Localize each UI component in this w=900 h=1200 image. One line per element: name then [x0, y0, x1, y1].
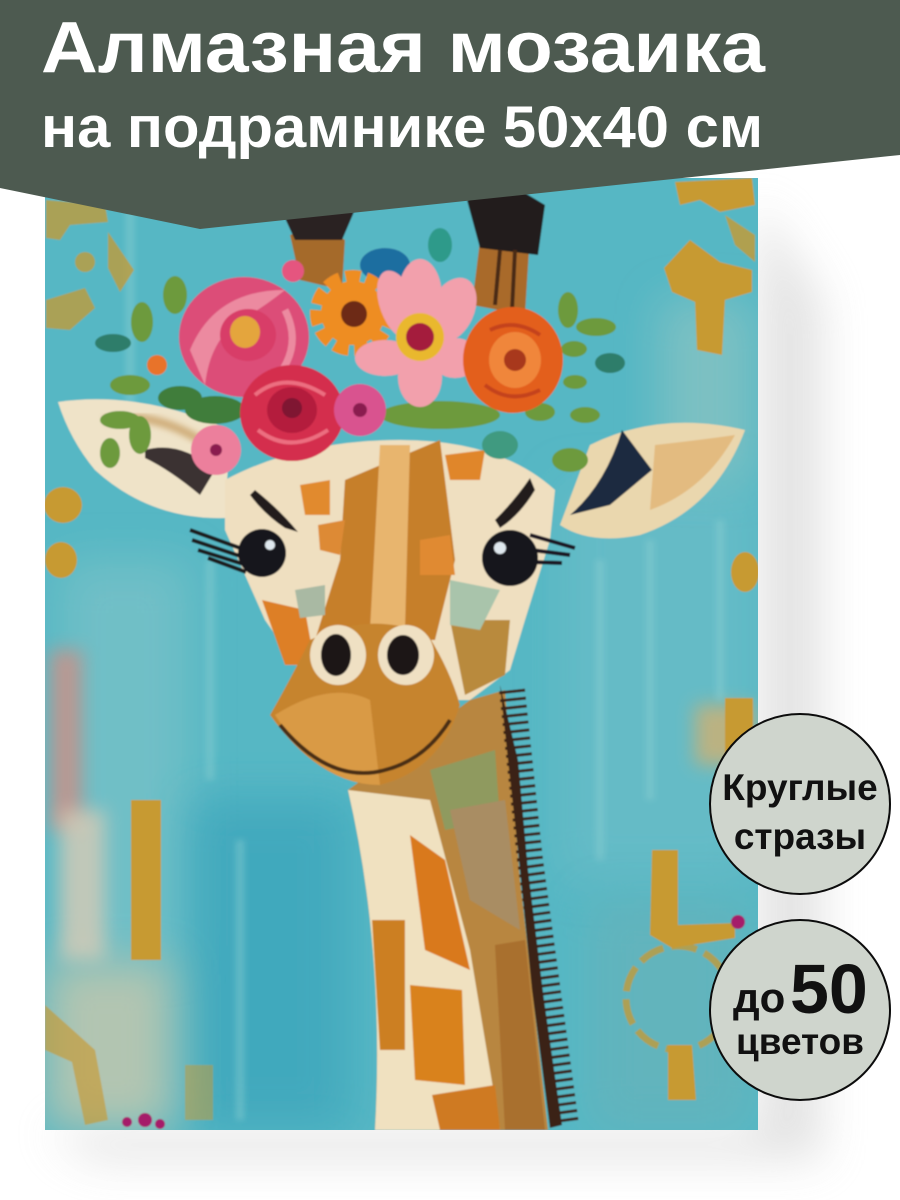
badge: up to 50 colours: до [733, 974, 785, 1021]
small pink flowers [147, 260, 386, 475]
badge: round rhinestones: Круглые [722, 767, 878, 808]
badge: round rhinestones [710, 714, 890, 894]
orange rose [463, 307, 563, 413]
canvas painting [40, 170, 765, 1135]
pink daisy [355, 259, 486, 407]
leaves [95, 228, 625, 472]
red rose [240, 365, 344, 461]
head [225, 440, 555, 700]
title line 1: Алмазная мозаика [41, 8, 766, 88]
badge: up to 50 colours: 50 [790, 950, 868, 1028]
left ear [58, 399, 230, 518]
mane [500, 685, 566, 1128]
painting background [40, 170, 765, 1135]
right ear [560, 423, 745, 538]
eyes [190, 478, 575, 586]
badge: up to 50 colours [710, 920, 890, 1100]
badge: up to 50 colours: цветов [736, 1021, 864, 1062]
gold decorations [44, 178, 759, 1125]
badge: round rhinestones: стразы [734, 816, 866, 857]
title line 2: на подрамнике 50х40 см [41, 95, 763, 160]
flower crown [95, 228, 625, 475]
header banner [0, 0, 900, 229]
purple paint dabs [122, 915, 745, 1129]
neck [348, 690, 548, 1130]
pink peony [179, 277, 309, 397]
horns [284, 190, 545, 315]
canvas shadow [45, 200, 822, 1160]
orange daisy [321, 281, 385, 345]
muzzle [270, 624, 460, 785]
